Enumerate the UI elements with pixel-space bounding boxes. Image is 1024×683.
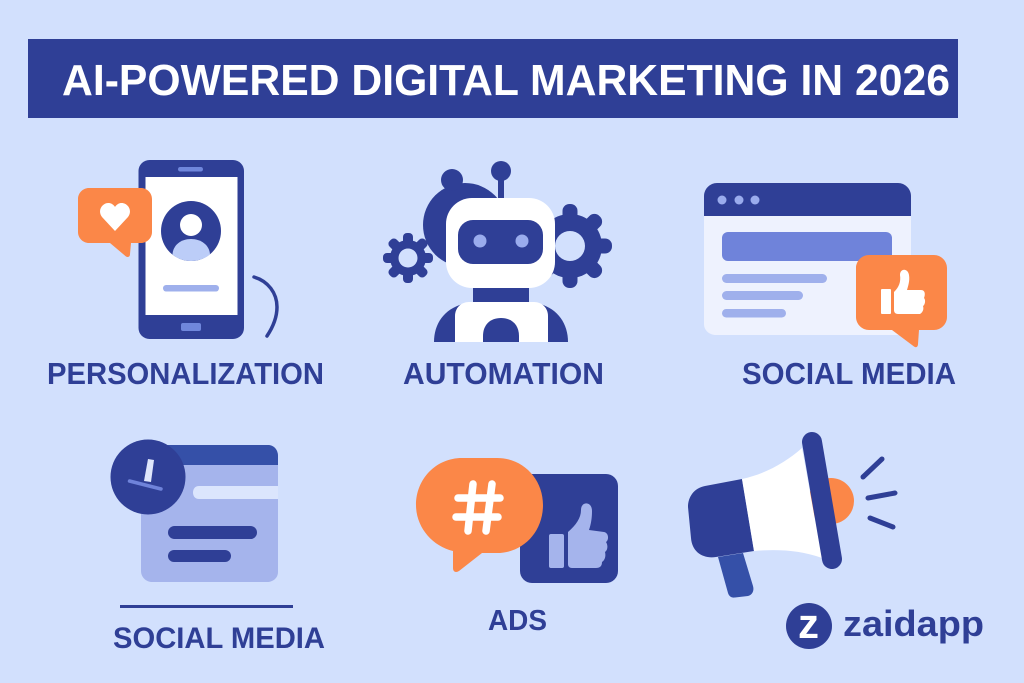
panel: ads: [416, 458, 618, 637]
panel: personalization: [47, 160, 324, 391]
logo: zaidapp: [786, 600, 984, 649]
label: personalization: PERSONALIZATION: [47, 356, 324, 391]
label: ads: ADS: [488, 605, 547, 637]
logo: zaidapp: z: [798, 600, 819, 647]
title banner: [28, 39, 958, 118]
icon: document card: [141, 445, 278, 582]
logo: zaidapp: zaidapp: [843, 603, 984, 644]
label: automation: AUTOMATION: [403, 356, 604, 391]
icon: navy badge: [110, 440, 186, 514]
icon: back circle: [423, 169, 507, 267]
label: social media: SOCIAL MEDIA: [113, 622, 325, 655]
icon: curved arc: [254, 277, 277, 336]
icon: large gear: [528, 204, 612, 288]
label: social media: SOCIAL MEDIA: [742, 356, 956, 391]
title banner: AI-POWERED DIGITAL MARKETING IN 2026: [62, 56, 950, 105]
icon: megaphone: [688, 442, 895, 598]
panel: social media browser: [704, 183, 956, 391]
icon: heart speech bubble: [78, 188, 152, 257]
panel: automation: [383, 161, 612, 391]
divider line: [120, 605, 293, 608]
icon: thumbs up tile: [520, 474, 618, 583]
panel: social media post: [110, 440, 325, 655]
icon: hashtag bubble: [416, 458, 543, 572]
icon: small gear: [383, 233, 433, 283]
icon: browser window: [704, 183, 911, 335]
icon: robot: [434, 161, 568, 342]
icon: smartphone: [138, 160, 244, 339]
icon: thumbs up bubble: [856, 255, 947, 347]
